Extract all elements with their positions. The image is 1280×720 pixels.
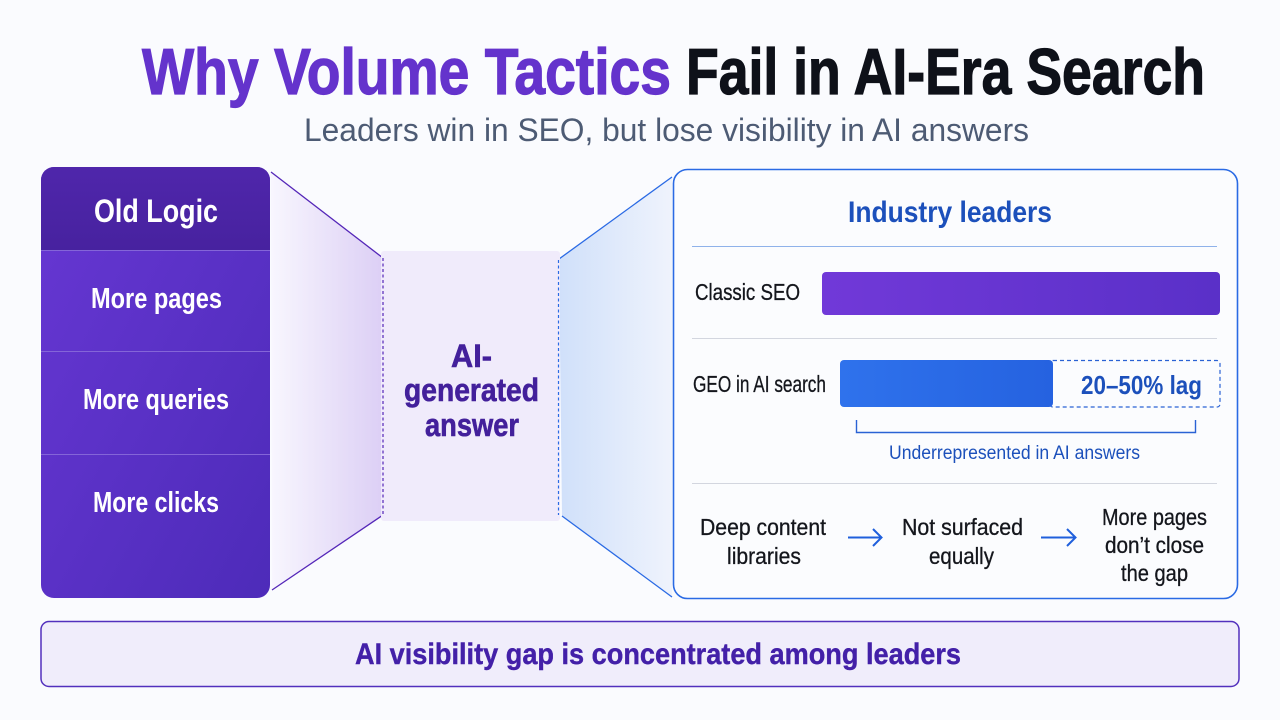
item: more queries: More queries [83, 384, 229, 416]
arrow: step two to three [1041, 529, 1076, 546]
label: AI-generated answer: AI- [451, 338, 492, 374]
subtitle: Leaders win in SEO, but lose visibility in AI answers [304, 112, 1029, 148]
bar: GEO in AI search [840, 360, 1053, 407]
title: Why Volume Tactics [142, 35, 671, 108]
step: not surfaced equally [902, 514, 1023, 569]
heading: industry leaders: Industry leaders [848, 196, 1052, 229]
bar: classic SEO [822, 272, 1220, 315]
right funnel connector [559, 177, 672, 597]
left funnel connector [271, 172, 383, 590]
panel: AI-generated answer [381, 251, 560, 521]
label: AI-generated answer: generated [404, 372, 539, 408]
panel: old logic [41, 167, 270, 598]
label: AI-generated answer: answer [425, 407, 519, 443]
callout: visibility gap: AI visibility gap is concentrated among leaders [355, 638, 961, 671]
step: not surfaced equally: equally [929, 543, 994, 569]
bracket [856, 420, 1196, 432]
label: AI-generated answer [404, 338, 539, 443]
step: deep content libraries: Deep content [700, 514, 827, 540]
title [142, 35, 1205, 108]
bar: lag outline [1050, 360, 1220, 407]
step: more pages don't close the gap: More pages [1102, 504, 1207, 530]
item: more pages: More pages [91, 283, 222, 315]
step: deep content libraries [700, 514, 827, 569]
arrow: step one to two [848, 529, 882, 546]
label: GEO in AI search: GEO in AI search [693, 371, 826, 397]
step: more pages don't close the gap: the gap [1121, 560, 1188, 586]
item: more clicks: More clicks [93, 487, 219, 519]
heading: old logic: Old Logic [94, 193, 218, 229]
panel: industry leaders [674, 170, 1238, 598]
step: not surfaced equally: Not surfaced [902, 514, 1023, 540]
label: classic SEO: Classic SEO [695, 279, 800, 305]
callout: visibility gap [41, 622, 1239, 686]
value: lag: 20–50% lag [1081, 370, 1202, 400]
caption: underrepresented: Underrepresented in AI answers [889, 443, 1140, 464]
step: more pages don't close the gap [1102, 504, 1207, 586]
step: deep content libraries: libraries [727, 543, 801, 569]
step: more pages don't close the gap: don’t close [1105, 532, 1204, 558]
